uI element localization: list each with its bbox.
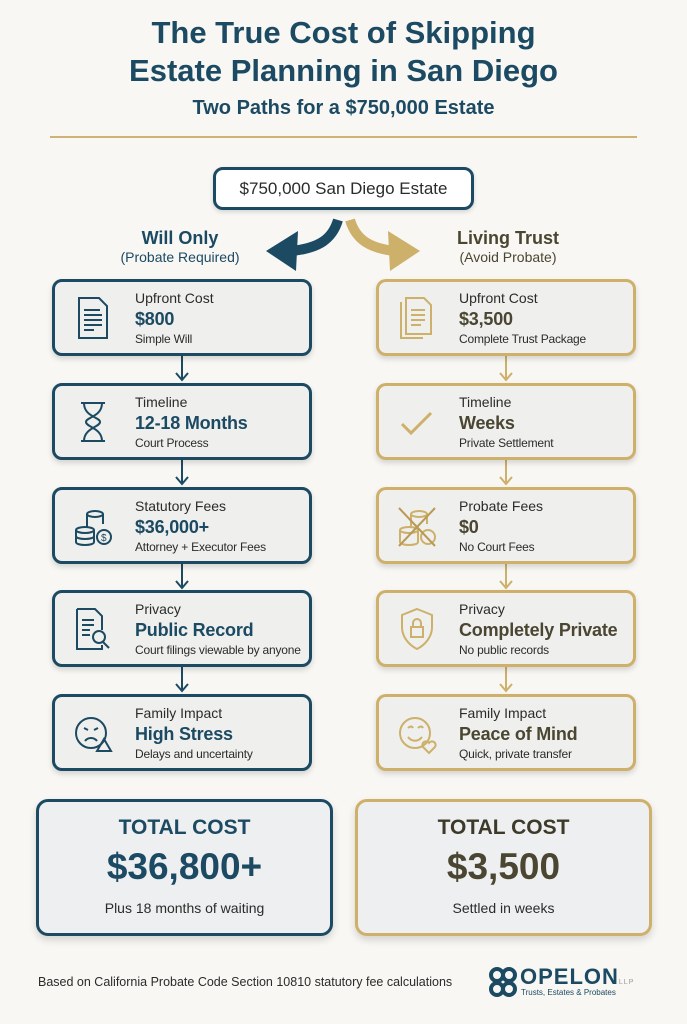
card: privacy will: Privacy xyxy=(135,601,181,617)
total: trust: $3,500 xyxy=(447,846,560,887)
card: upfront trust xyxy=(376,279,636,356)
heading: will only xyxy=(120,228,240,265)
card: family trust: Quick, private transfer xyxy=(459,747,572,761)
card: privacy will: Court filings viewable by anyone xyxy=(135,643,301,657)
card: fees trust: Probate Fees xyxy=(459,498,543,514)
card: upfront trust: Upfront Cost xyxy=(459,290,538,306)
total: trust: TOTAL COST xyxy=(438,816,569,839)
card: timeline will: 12-18 Months xyxy=(135,413,248,433)
card: family trust: Peace of Mind xyxy=(459,724,577,744)
logo xyxy=(489,964,634,997)
card: family trust: Family Impact xyxy=(459,705,546,721)
card: privacy will: Public Record xyxy=(135,620,253,640)
card: timeline trust: Private Settlement xyxy=(459,436,553,450)
footnote: Based on California Probate Code Section 10810 statutory fee calculations xyxy=(38,975,452,989)
title: Estate Planning in San Diego xyxy=(129,53,558,88)
card: upfront will xyxy=(52,279,312,356)
total: will: $36,800+ xyxy=(107,846,262,887)
card: upfront will: $800 xyxy=(135,309,174,329)
card: upfront will: Upfront Cost xyxy=(135,290,214,306)
card: timeline trust: Timeline xyxy=(459,394,511,410)
arrows xyxy=(266,218,420,271)
card: timeline trust: Weeks xyxy=(459,413,515,433)
card: upfront trust: Complete Trust Package xyxy=(459,332,586,346)
connectors xyxy=(52,279,636,993)
card: timeline trust xyxy=(376,383,636,460)
card: privacy trust: No public records xyxy=(459,643,549,657)
card: upfront trust: $3,500 xyxy=(459,309,513,329)
card: privacy trust: Completely Private xyxy=(459,620,617,640)
card: fees will: $ xyxy=(101,533,107,544)
total: trust xyxy=(355,799,652,936)
heading: will only: (Probate Required) xyxy=(120,249,240,265)
card: upfront will: Simple Will xyxy=(135,332,192,346)
card: family will: Delays and uncertainty xyxy=(135,747,253,761)
estate box: $750,000 San Diego Estate xyxy=(240,179,447,198)
card: fees will: Attorney + Executor Fees xyxy=(135,540,266,554)
title: The True Cost of Skipping xyxy=(151,15,536,50)
card: fees will xyxy=(52,487,312,564)
card: fees trust: $0 xyxy=(459,517,479,537)
card: family trust xyxy=(376,694,636,771)
heading: living trust: Living Trust xyxy=(457,228,559,248)
subtitle: Two Paths for a $750,000 Estate xyxy=(192,97,494,119)
card: privacy trust xyxy=(376,590,636,667)
card: fees will: Statutory Fees xyxy=(135,498,226,514)
logo: OPELONLLP xyxy=(520,964,634,989)
total: trust: Settled in weeks xyxy=(453,900,554,916)
heading: living trust xyxy=(457,228,559,265)
card: fees trust: No Court Fees xyxy=(459,540,534,554)
card: privacy will xyxy=(52,590,312,667)
card: timeline will: Timeline xyxy=(135,394,187,410)
card: family will xyxy=(52,694,312,771)
card: timeline will: Court Process xyxy=(135,436,208,450)
card: family will: Family Impact xyxy=(135,705,222,721)
total: will: TOTAL COST xyxy=(119,816,250,839)
card: fees trust xyxy=(376,487,636,564)
card: timeline will xyxy=(52,383,312,460)
card: family will: High Stress xyxy=(135,724,233,744)
total: will: Plus 18 months of waiting xyxy=(105,900,264,916)
card: fees will: $36,000+ xyxy=(135,517,209,537)
heading: living trust: (Avoid Probate) xyxy=(459,249,556,265)
title xyxy=(129,15,558,88)
card: privacy trust: Privacy xyxy=(459,601,505,617)
heading: will only: Will Only xyxy=(142,228,218,248)
estate box xyxy=(213,167,474,210)
logo: Trusts, Estates & Probates xyxy=(521,988,616,997)
total: will xyxy=(36,799,333,936)
